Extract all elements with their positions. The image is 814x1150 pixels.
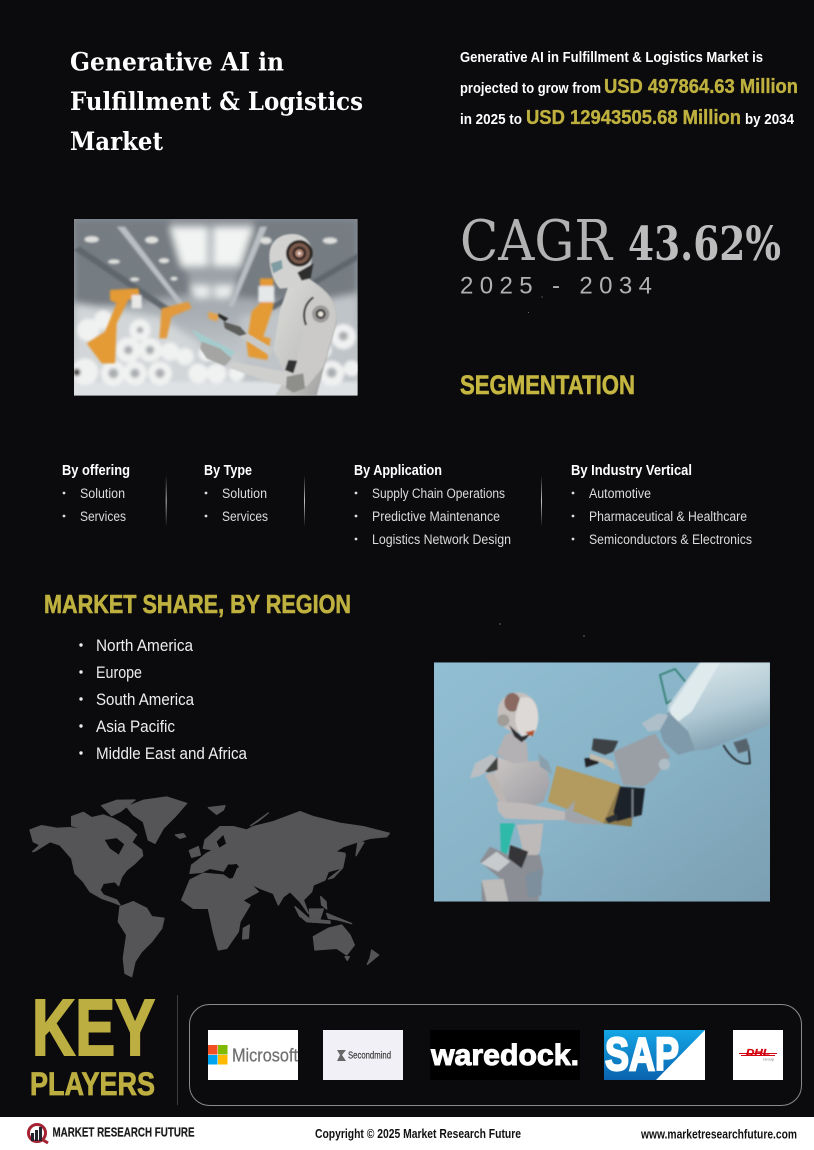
region list: North America xyxy=(96,636,193,655)
CAGR figure: 2025 - 2034 xyxy=(460,272,652,300)
segmentation: by industry vertical: Automotive xyxy=(589,486,651,501)
segmentation: by application: By Application xyxy=(354,462,442,479)
title: Market xyxy=(70,127,163,156)
cardboard box xyxy=(548,766,645,827)
segmentation: by type xyxy=(204,462,268,524)
segmentation: by industry vertical xyxy=(571,462,752,547)
logo: Secondmind: Secondmind xyxy=(348,1050,391,1062)
logo: DHL xyxy=(733,1030,783,1080)
market size summary text: projected to grow from xyxy=(460,80,601,97)
logo: SAP: SAP xyxy=(605,1028,679,1080)
market size summary text: USD 497864.63 Million xyxy=(604,76,798,98)
segmentation: by industry vertical: Semiconductors & Electronics xyxy=(589,532,752,547)
region list xyxy=(79,636,247,763)
segmentation: by offering: Solution xyxy=(80,486,125,501)
segmentation: by type: Services xyxy=(222,509,268,524)
segmentation: by application xyxy=(354,462,511,547)
market size summary text xyxy=(460,49,798,129)
title: Generative AI in xyxy=(70,48,284,76)
logo: waredock: waredock. xyxy=(430,1039,579,1072)
footer bar: Copyright © 2025 Market Research Future xyxy=(315,1126,521,1141)
footer bar xyxy=(0,1117,814,1150)
segmentation: by application: Predictive Maintenance xyxy=(372,509,500,524)
CAGR figure: CAGR xyxy=(460,209,614,274)
title xyxy=(70,48,363,156)
heading: key players: KEY xyxy=(32,983,155,1072)
robot figure xyxy=(192,234,337,396)
segmentation: by type: By Type xyxy=(204,462,252,479)
market size summary text: Generative AI in Fulfillment & Logistics Market is xyxy=(460,49,763,66)
region list: Asia Pacific xyxy=(96,717,175,736)
footer bar: MARKET RESEARCH FUTURE xyxy=(52,1124,195,1140)
photo: humanoid robot in warehouse xyxy=(72,219,360,396)
CAGR figure xyxy=(460,209,781,300)
logo: Microsoft: Microsoft xyxy=(232,1044,298,1066)
region list: South America xyxy=(96,690,194,709)
segmentation: by type: Solution xyxy=(222,486,267,501)
segmentation: by offering: By offering xyxy=(62,462,130,479)
logo: DHL: DHL xyxy=(746,1048,770,1058)
market size summary text: USD 12943505.68 Million xyxy=(526,107,741,129)
humanoid robot xyxy=(470,692,605,902)
photo: robot receiving a box from robotic arm xyxy=(434,662,770,902)
segmentation: by industry vertical: Pharmaceutical & Healthcare xyxy=(589,509,747,524)
footer logo icon xyxy=(28,1124,48,1143)
region list: Europe xyxy=(96,663,142,682)
heading: key players xyxy=(30,983,155,1102)
region list: Middle East and Africa xyxy=(96,744,247,763)
segmentation: by industry vertical: By Industry Vertical xyxy=(571,462,692,479)
segmentation: by application: Supply Chain Operations xyxy=(372,486,505,501)
robotic arm xyxy=(584,662,770,787)
heading: segmentation: SEGMENTATION xyxy=(460,370,635,400)
logo: waredock xyxy=(430,1030,580,1080)
segmentation: by offering: Services xyxy=(80,509,126,524)
heading: key players: PLAYERS xyxy=(30,1066,155,1102)
logo: Secondmind xyxy=(323,1030,403,1080)
market size summary text: by 2034 xyxy=(745,111,795,128)
heading: market share by region: MARKET SHARE, BY REGION xyxy=(44,589,351,619)
key players panel xyxy=(190,1004,802,1106)
segmentation: by application: Logistics Network Design xyxy=(372,532,511,547)
title: Fulfillment & Logistics xyxy=(70,87,363,116)
market size summary text: in 2025 to xyxy=(460,111,522,128)
segmentation: by offering xyxy=(62,462,130,524)
world map xyxy=(30,797,389,977)
logo: Microsoft xyxy=(208,1030,298,1080)
logo: DHL: Group xyxy=(763,1056,775,1062)
